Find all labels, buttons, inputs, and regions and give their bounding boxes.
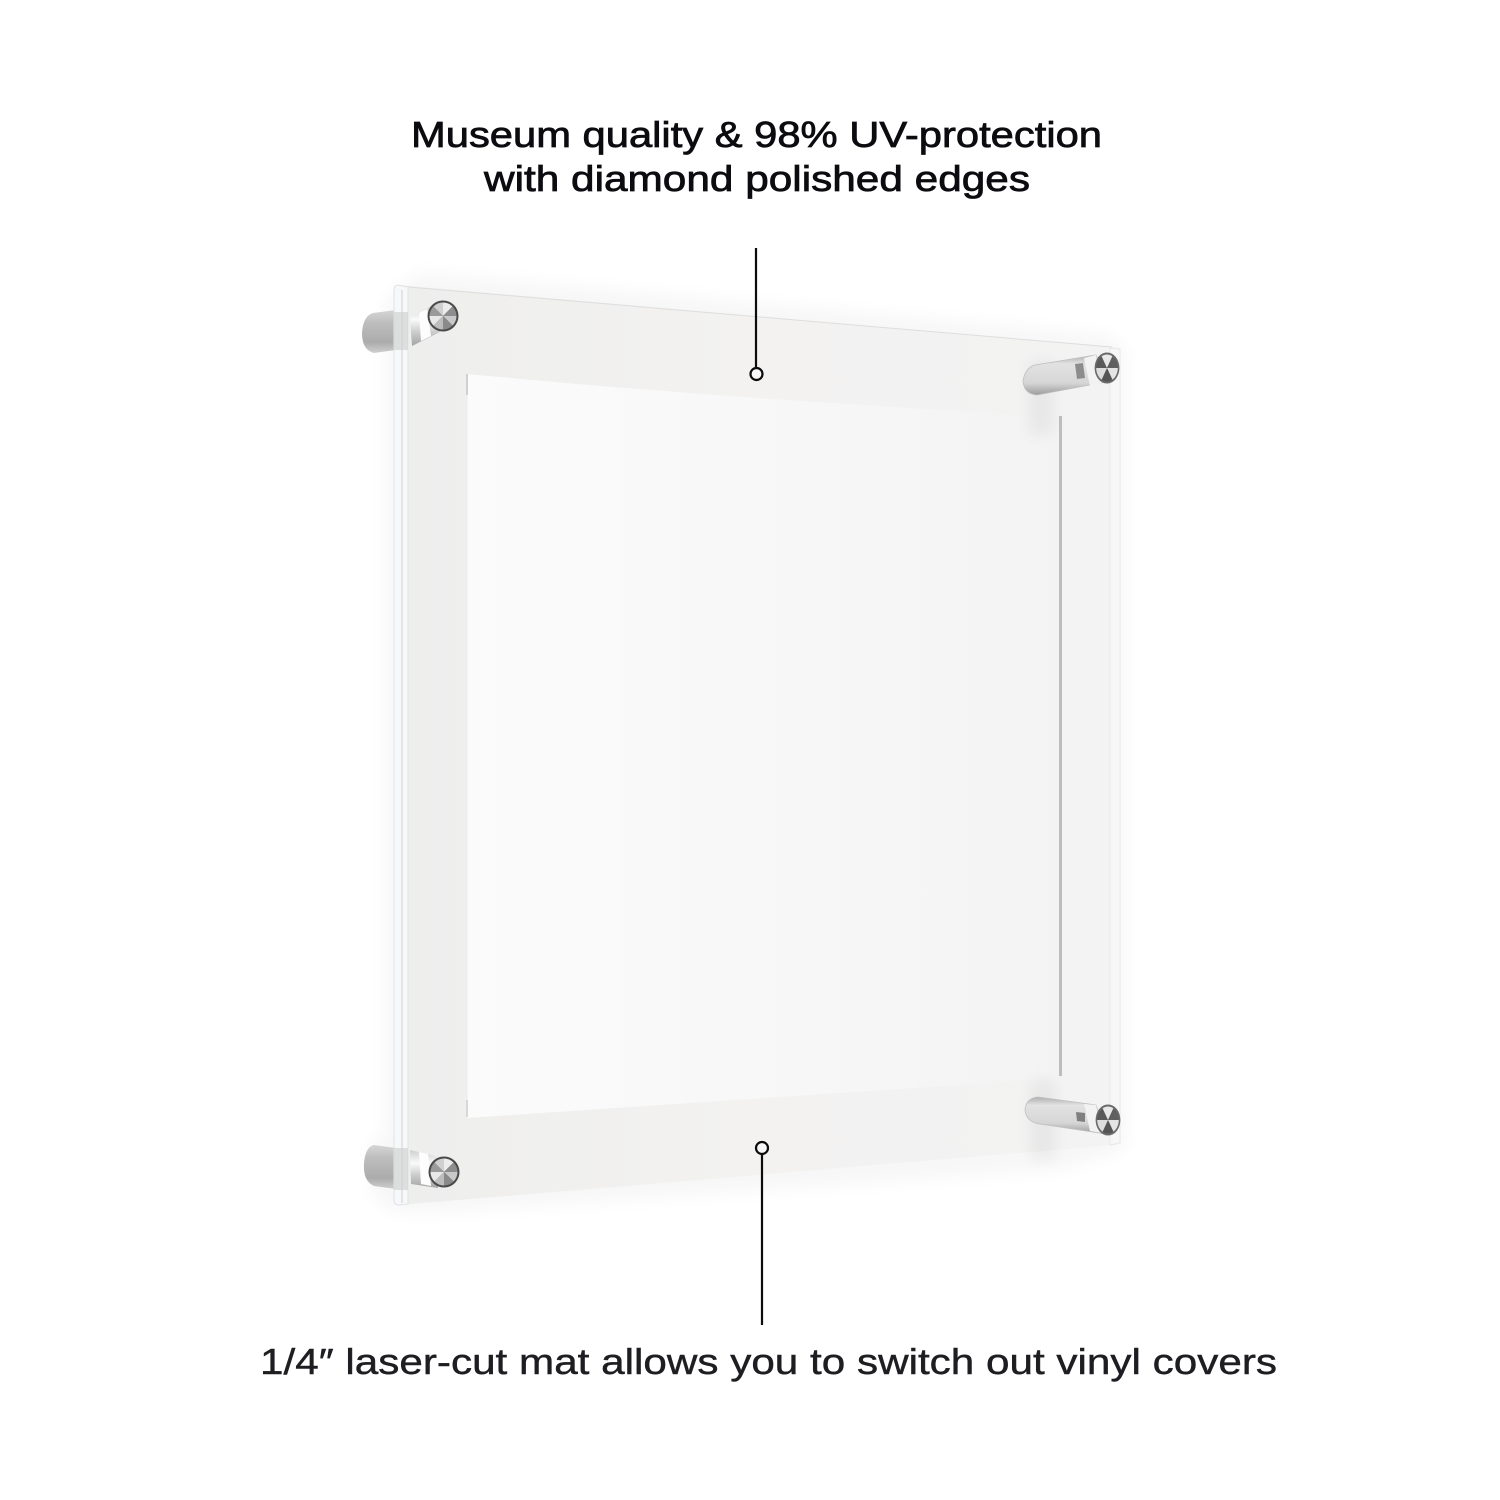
heading: UV protection callout text: with diamond polished edges: [483, 158, 1030, 199]
caption: mat callout text: 1/4″ laser-cut mat allows you to switch out vinyl covers: [260, 1341, 1277, 1382]
wall shadow behind frame: [370, 272, 1126, 1214]
heading: UV protection callout text: [411, 114, 1102, 199]
panel right edge: [1110, 348, 1120, 1145]
top callout leader with dot: [750, 248, 762, 380]
hardware: top left: [410, 300, 459, 346]
bottom callout leader with dot: [756, 1142, 768, 1325]
acrylic frame illustration: [362, 272, 1126, 1214]
post seen through panel edge, bottom: [394, 1148, 408, 1190]
post reflections on acrylic: [1028, 360, 1056, 1160]
mat cut edges: [467, 374, 1060, 1117]
mat window: [467, 374, 1062, 1118]
left mounting posts (behind panel): [362, 310, 396, 1189]
hardware: bottom left: [410, 1150, 460, 1188]
panel left edge: [394, 285, 408, 1205]
heading: UV protection callout text: Museum quality & 98% UV-protection: [411, 114, 1102, 155]
hardware: bottom right: [1025, 1097, 1121, 1136]
hardware: top right: [1023, 352, 1120, 395]
top highlight: [408, 287, 1112, 347]
acrylic panel: [394, 285, 1120, 1205]
post seen through panel edge, top: [394, 312, 408, 350]
